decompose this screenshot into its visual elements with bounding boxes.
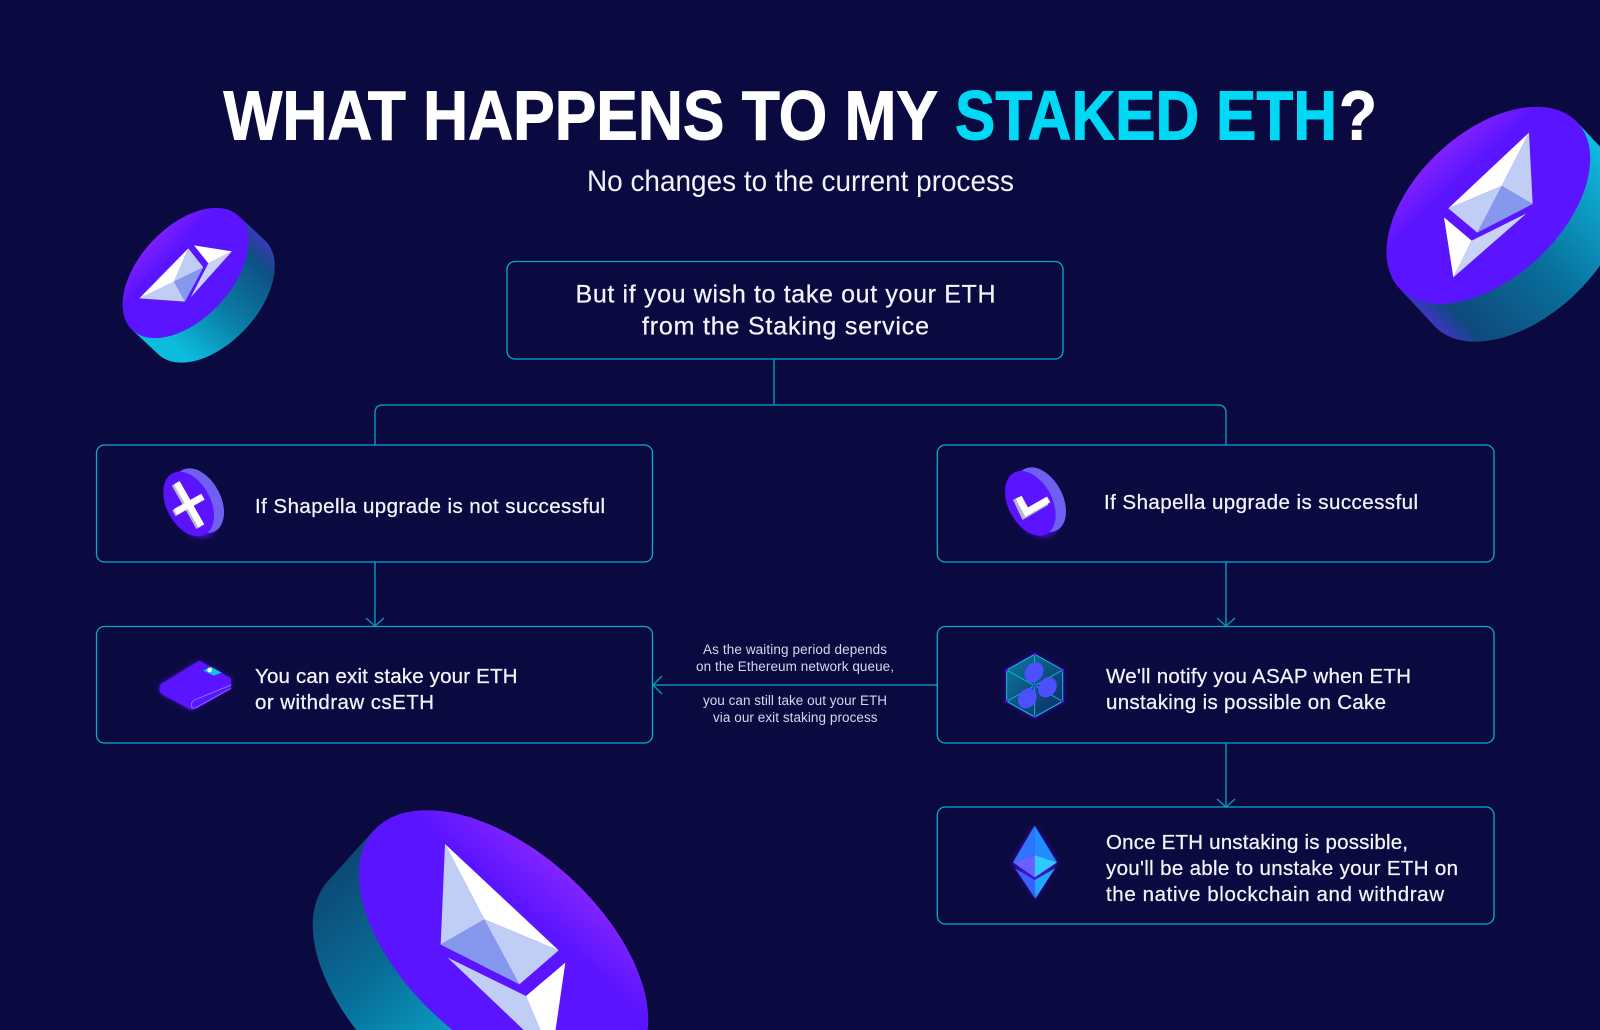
icon: wallet [159,661,231,710]
panel: intro question: But if you wish to take out your ETH [576,280,996,308]
panel: unstake and withdraw: you'll be able to unstake your ETH on [1106,857,1458,880]
note below arrow: you can still take out your ETH [703,693,887,708]
connector: top box to branches [375,359,1226,445]
subtitle: No changes to the current process [587,165,1014,198]
panel: notify when unstaking possible: unstaking is possible on Cake [1106,691,1386,714]
panel: unstake and withdraw: Once ETH unstaking is possible, [1106,831,1408,854]
note below arrow: via our exit staking process [713,710,878,725]
decorative coin: top right [1350,69,1600,379]
panel: upgrade not successful: If Shapella upgrade is not successful [255,495,605,518]
icon: check coin [995,459,1076,546]
panel: upgrade successful [937,445,1494,562]
icon: ethereum glyph on top right coin [1444,133,1533,277]
title: WHAT HAPPENS TO MY [224,76,938,154]
panel: exit stake [96,626,652,743]
decorative coin: top left [99,185,299,386]
panel: exit stake: or withdraw csETH [255,691,434,714]
arrow: successful to notify [1217,562,1235,626]
panel: exit stake: You can exit stake your ETH [255,665,518,688]
panel: intro question: from the Staking service [642,312,929,340]
icon: ethereum glyph on top left coin [139,245,232,302]
note above arrow: As the waiting period depends [703,642,887,657]
decorative coin: bottom [313,810,648,1030]
icon: ethereum glyph on bottom coin [441,844,565,1030]
panel: intro question [507,262,1063,359]
icon: cross coin [153,460,234,546]
note below arrow [703,693,887,725]
panel: unstake and withdraw [937,807,1494,924]
note above arrow: on the Ethereum network queue, [696,659,894,674]
title [224,76,1377,154]
panel: notify when unstaking possible: We'll notify you ASAP when ETH [1106,665,1411,688]
title: STAKED ETH [955,76,1337,154]
panel: unstake and withdraw: the native blockchain and withdraw [1106,883,1444,906]
icon: cube with coins [1005,653,1064,718]
arrow: notify to unstake [1217,743,1235,807]
panel: upgrade not successful [96,445,652,562]
icon: ethereum diamond [1013,826,1057,899]
note above arrow [696,642,894,674]
arrow: not successful to exit stake [366,562,384,626]
arrow: notify to exit stake [653,676,937,694]
panel: notify when unstaking possible [937,626,1494,743]
panel: upgrade successful: If Shapella upgrade is successful [1104,491,1418,514]
title: ? [1339,76,1377,154]
